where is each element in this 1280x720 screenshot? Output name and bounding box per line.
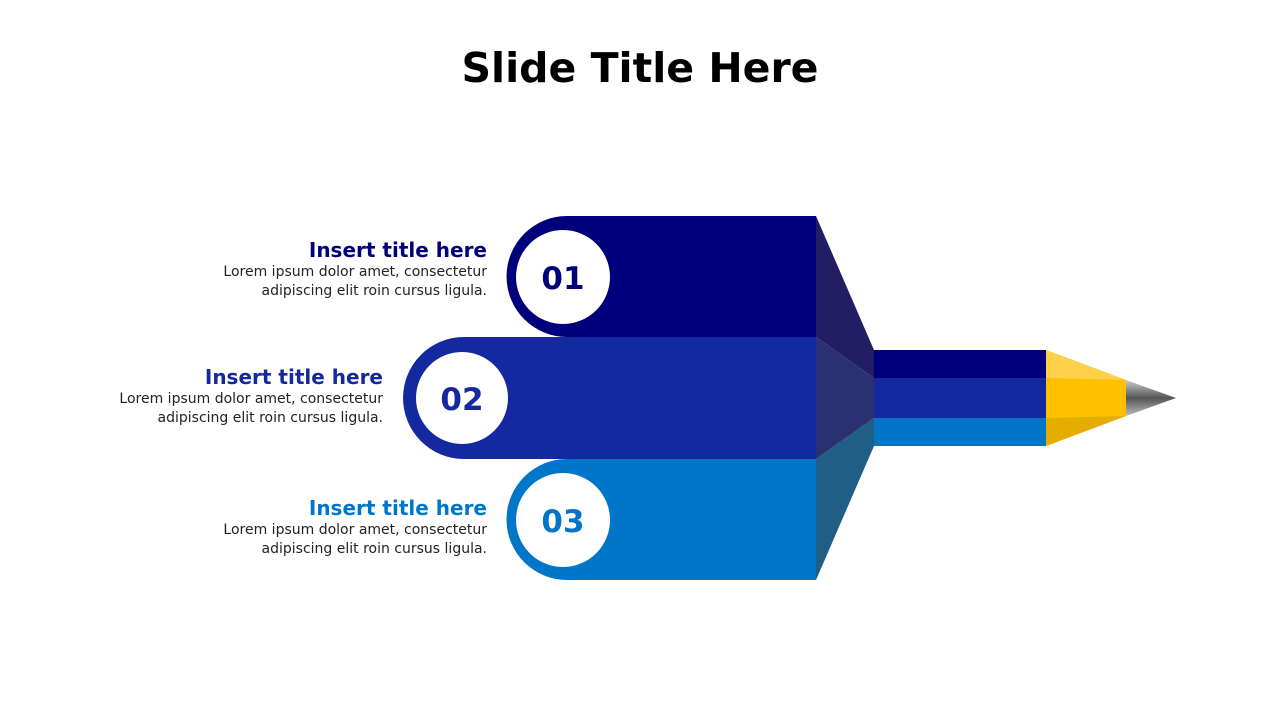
circle 02: 02	[440, 382, 484, 418]
circle 03: 03	[541, 504, 585, 540]
text block 3	[223, 496, 487, 557]
text block 1: Lorem ipsum dolor amet, consectetur	[223, 264, 487, 280]
text block 3: Insert title here	[309, 496, 487, 520]
circle 03	[516, 473, 610, 567]
text block 2: Insert title here	[205, 365, 383, 389]
text block 1: adipiscing elit roin cursus ligula.	[262, 283, 487, 299]
text block 2: Lorem ipsum dolor amet, consectetur	[119, 391, 383, 407]
text block 2	[119, 365, 383, 426]
text block 1	[223, 238, 487, 299]
text block 2: adipiscing elit roin cursus ligula.	[158, 410, 383, 426]
band 2	[403, 337, 874, 459]
circle 01: 01	[541, 261, 585, 297]
band 3	[506, 418, 874, 580]
pencil body	[874, 350, 1046, 446]
circle 02	[416, 352, 508, 444]
text block 1: Insert title here	[309, 238, 487, 262]
pencil tip	[1046, 350, 1176, 446]
text block 3: adipiscing elit roin cursus ligula.	[262, 541, 487, 557]
band 1	[507, 216, 874, 378]
circle 01	[516, 230, 610, 324]
text block 3: Lorem ipsum dolor amet, consectetur	[223, 522, 487, 538]
title: Slide Title Here	[462, 44, 818, 92]
